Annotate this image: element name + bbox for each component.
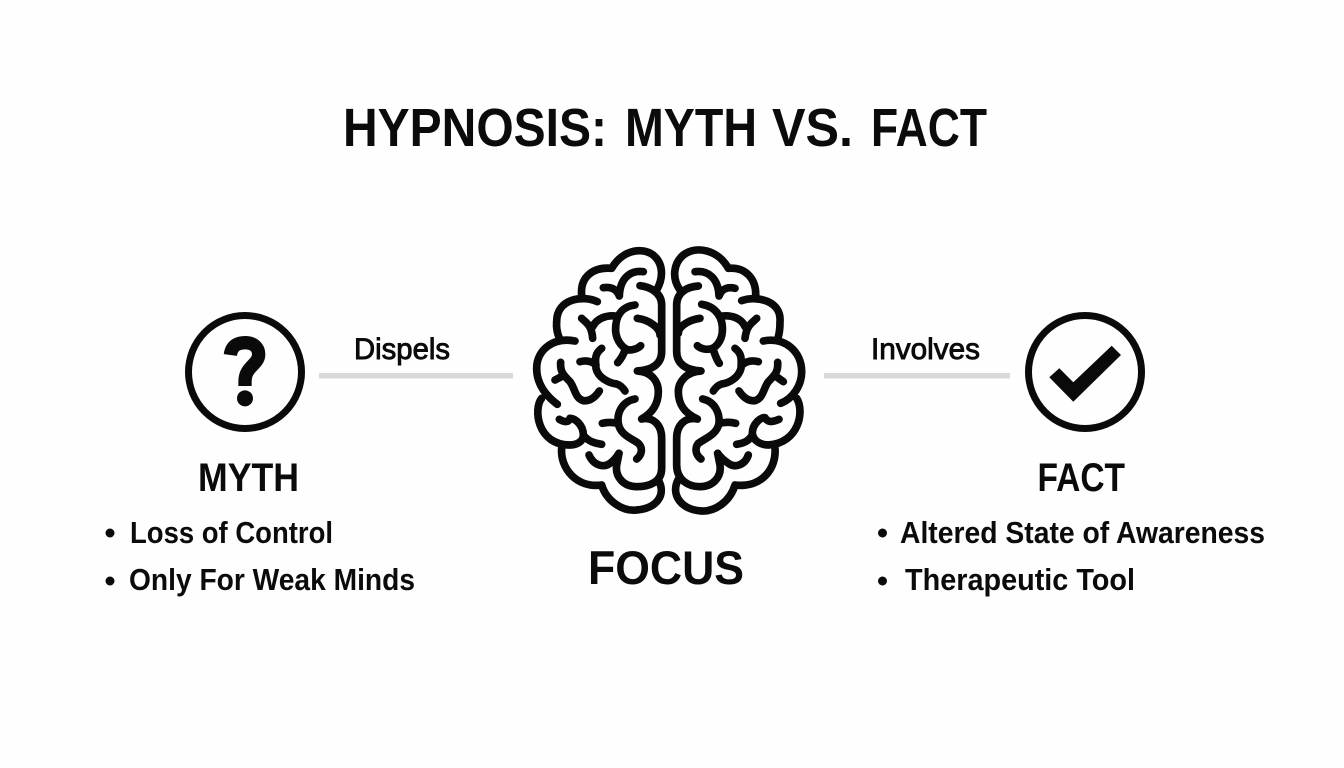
list: fact points bbox=[878, 515, 1265, 597]
panel: focus bbox=[537, 250, 802, 594]
title: FACT bbox=[871, 98, 987, 158]
icon: question mark in circle bbox=[188, 316, 302, 428]
icon: brain bbox=[537, 250, 802, 511]
title: VS. bbox=[772, 98, 853, 158]
connector: dispels bbox=[319, 333, 513, 378]
title: HYPNOSIS: bbox=[343, 98, 607, 158]
icon: check mark in circle bbox=[1028, 316, 1142, 428]
title bbox=[343, 98, 987, 158]
panel: fact bbox=[878, 316, 1265, 597]
list: fact points: Therapeutic Tool bbox=[905, 562, 1135, 597]
list: fact points: Altered State of Awareness bbox=[900, 515, 1265, 550]
title: MYTH bbox=[625, 98, 757, 158]
list: myth points bbox=[106, 515, 415, 597]
brain right hemisphere bbox=[675, 250, 802, 511]
connector: involves: Involves bbox=[871, 333, 980, 366]
connector: involves bbox=[824, 333, 1010, 378]
heading: fact: FACT bbox=[1038, 456, 1125, 500]
brain left hemisphere bbox=[537, 251, 662, 510]
connector: dispels: Dispels bbox=[354, 333, 450, 366]
list: myth points: Loss of Control bbox=[130, 515, 333, 550]
heading: myth: MYTH bbox=[198, 456, 299, 500]
heading: focus: FOCUS bbox=[588, 541, 744, 594]
panel: myth bbox=[106, 316, 415, 597]
list: myth points: Only For Weak Minds bbox=[129, 562, 415, 597]
